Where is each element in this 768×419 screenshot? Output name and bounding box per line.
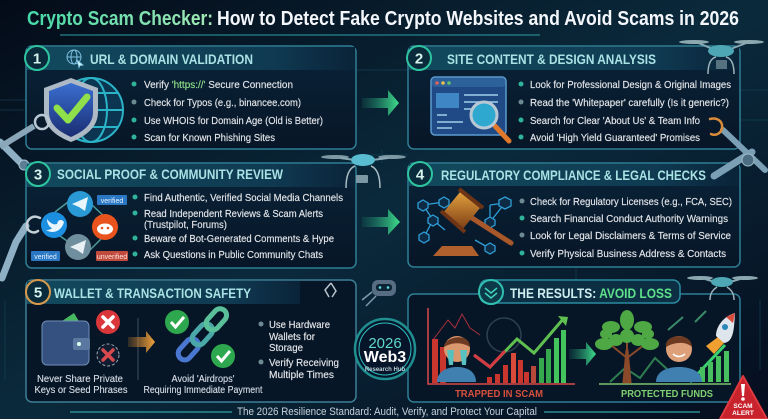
heading 3: SOCIAL PROOF & COMMUNITY REVIEW	[57, 166, 284, 182]
panel 4: regulatory compliance and legal checks	[408, 162, 740, 267]
panel 6: results avoid loss	[408, 280, 740, 402]
panel 5 header band	[27, 281, 300, 304]
drone: centre	[321, 154, 406, 188]
icon: chain links with checks	[165, 306, 235, 368]
chart: trapped in scam	[428, 308, 575, 384]
icon: gavel and blockchain	[418, 189, 511, 256]
bullet list 1: Use WHOIS for Domain Age (Old is Better)	[144, 115, 323, 127]
number badge 5: 5	[34, 284, 42, 302]
number badge 2	[407, 46, 431, 70]
number badge 3	[26, 162, 50, 186]
bullet list 1: Verify 'https://' Secure Connection	[144, 79, 293, 91]
bullet list 3: Find Authentic, Verified Social Media Channels	[144, 192, 343, 204]
icon: rocket	[706, 313, 735, 354]
bullet list 4: Look for Legal Disclaimers & Terms of Service	[530, 230, 731, 242]
caption: airdrops: Requiring Immediate Payment	[144, 384, 263, 396]
heading 1: URL & DOMAIN VALIDATION	[90, 51, 253, 67]
robot claw	[325, 283, 336, 297]
arrow: scam to protected	[569, 342, 596, 366]
panel 4 header band	[409, 164, 739, 186]
caption: protected funds: PROTECTED FUNDS	[621, 388, 713, 400]
bullet list 4: Search Financial Conduct Authority Warnings	[530, 213, 728, 225]
robot arm: upper left	[0, 142, 29, 170]
icon: social network graph	[31, 191, 128, 261]
title: Crypto Scam Checker:	[27, 8, 213, 30]
number badge 4: 4	[416, 166, 425, 184]
icon: globe cursor	[67, 50, 83, 68]
tag: verified top: verified	[101, 198, 123, 205]
person: smiling, with rocket and bars	[656, 311, 735, 382]
panel 2 header band	[409, 47, 739, 70]
number badge 4	[408, 162, 432, 186]
heading 5: WALLET & TRANSACTION SAFETY	[54, 285, 252, 301]
bullet list 3: Ask Questions in Public Community Chats	[144, 249, 323, 261]
caption: private keys	[34, 373, 128, 396]
panel 5: wallet and transaction safety	[26, 280, 356, 402]
bullet list 3	[132, 192, 343, 261]
panel 1: URL and domain validation	[0, 46, 356, 149]
bullet list 5: Wallets for	[269, 331, 315, 343]
bullet list 2: Avoid 'High Yield Guaranteed' Promises	[530, 132, 700, 144]
caption: airdrops	[144, 373, 263, 396]
badge: 2026 Web3 research hub: 2026	[368, 335, 402, 352]
caption: airdrops: Avoid 'Airdrops'	[172, 373, 234, 385]
bullet list 5: Storage	[269, 342, 303, 354]
robot arm: right of panel 4 header	[714, 152, 754, 176]
bullet list 5: Use Hardware	[269, 319, 330, 331]
bullet list 3: Read Independent Reviews & Scam Alerts	[144, 208, 323, 220]
scam alert sign: ALERT	[732, 410, 754, 417]
number badge 5	[26, 280, 50, 304]
bullet list 2: Search for Clear 'About Us' & Team Info	[530, 115, 700, 127]
bullet list 2: Read the 'Whitepaper' carefully (Is it generic?)	[530, 97, 729, 109]
drone: bottom right	[687, 276, 758, 300]
bullet list 4: Verify Physical Business Address & Contacts	[530, 248, 726, 260]
badge: 2026 Web3 research hub: Web3	[364, 349, 406, 366]
heading 2: SITE CONTENT & DESIGN ANALYSIS	[447, 51, 656, 67]
panel 3 header band	[27, 164, 355, 187]
badge: 2026 Web3 research hub	[355, 319, 415, 379]
person: crying	[437, 336, 476, 382]
bullet list 3: (Trustpilot, Forums)	[144, 219, 227, 231]
icon: browser with magnifier	[431, 77, 509, 141]
panel 1 header band	[27, 47, 355, 70]
icon: growing tree	[595, 310, 731, 384]
icon: dashed cross	[97, 344, 119, 366]
heading 4: REGULATORY COMPLIANCE & LEGAL CHECKS	[441, 167, 706, 183]
arrow: panel 3 to 4	[362, 209, 400, 235]
arrow: panel 1 to 2	[362, 90, 399, 116]
icon: wallet	[42, 313, 90, 365]
caption: private keys: Never Share Private	[37, 373, 123, 385]
caption: private keys: Keys or Seed Phrases	[34, 384, 128, 396]
bullet list 1: Check for Typos (e.g., binancee.com)	[144, 97, 301, 109]
bullet list 5: Multiple Times	[269, 369, 334, 381]
tag: verified bottom: verified	[34, 254, 57, 261]
bullet list 5: Verify Receiving	[269, 357, 339, 369]
scam alert sign: SCAM	[733, 403, 753, 410]
robot arm and claw: right of panel 2	[710, 118, 765, 170]
icon: red cross	[96, 310, 120, 334]
results header pill: THE RESULTS: AVOID LOSS	[510, 285, 672, 301]
caption: trapped in scam: TRAPPED IN SCAM	[455, 388, 543, 400]
bullet list 2	[518, 79, 731, 144]
number badge 1	[25, 46, 49, 70]
robot arm and claw: left of panel 3	[2, 217, 40, 278]
bullet list 1: Scan for Known Phishing Sites	[144, 132, 275, 144]
bullet list 1	[132, 79, 323, 144]
results header pill	[479, 280, 680, 304]
footer: The 2026 Resilience Standard: Audit, Verify, and Protect Your Capital	[237, 406, 537, 418]
robot head	[362, 280, 396, 306]
number badge 3: 3	[34, 166, 42, 184]
panel 2: site content and design analysis	[407, 46, 740, 149]
scam alert sign	[720, 376, 767, 419]
arrow: wallet to chain	[128, 331, 155, 353]
panel 3: social proof and community review	[26, 162, 356, 268]
bullet list 4: Check for Regulatory Licenses (e.g., FCA, SEC)	[530, 196, 732, 208]
tag: unverified: unverified	[97, 254, 127, 261]
bullet list 3: Beware of Bot-Generated Comments & Hype	[144, 233, 334, 245]
bullet list 5	[258, 319, 339, 381]
bullet list 4	[520, 196, 732, 260]
icon: shield and globe	[0, 78, 123, 147]
drone: top right	[679, 40, 764, 74]
number badge 1: 1	[33, 50, 41, 68]
badge: 2026 Web3 research hub: Research Hub	[365, 367, 406, 373]
number badge 2: 2	[415, 50, 423, 68]
bullet list 2: Look for Professional Design & Original Images	[530, 79, 731, 91]
